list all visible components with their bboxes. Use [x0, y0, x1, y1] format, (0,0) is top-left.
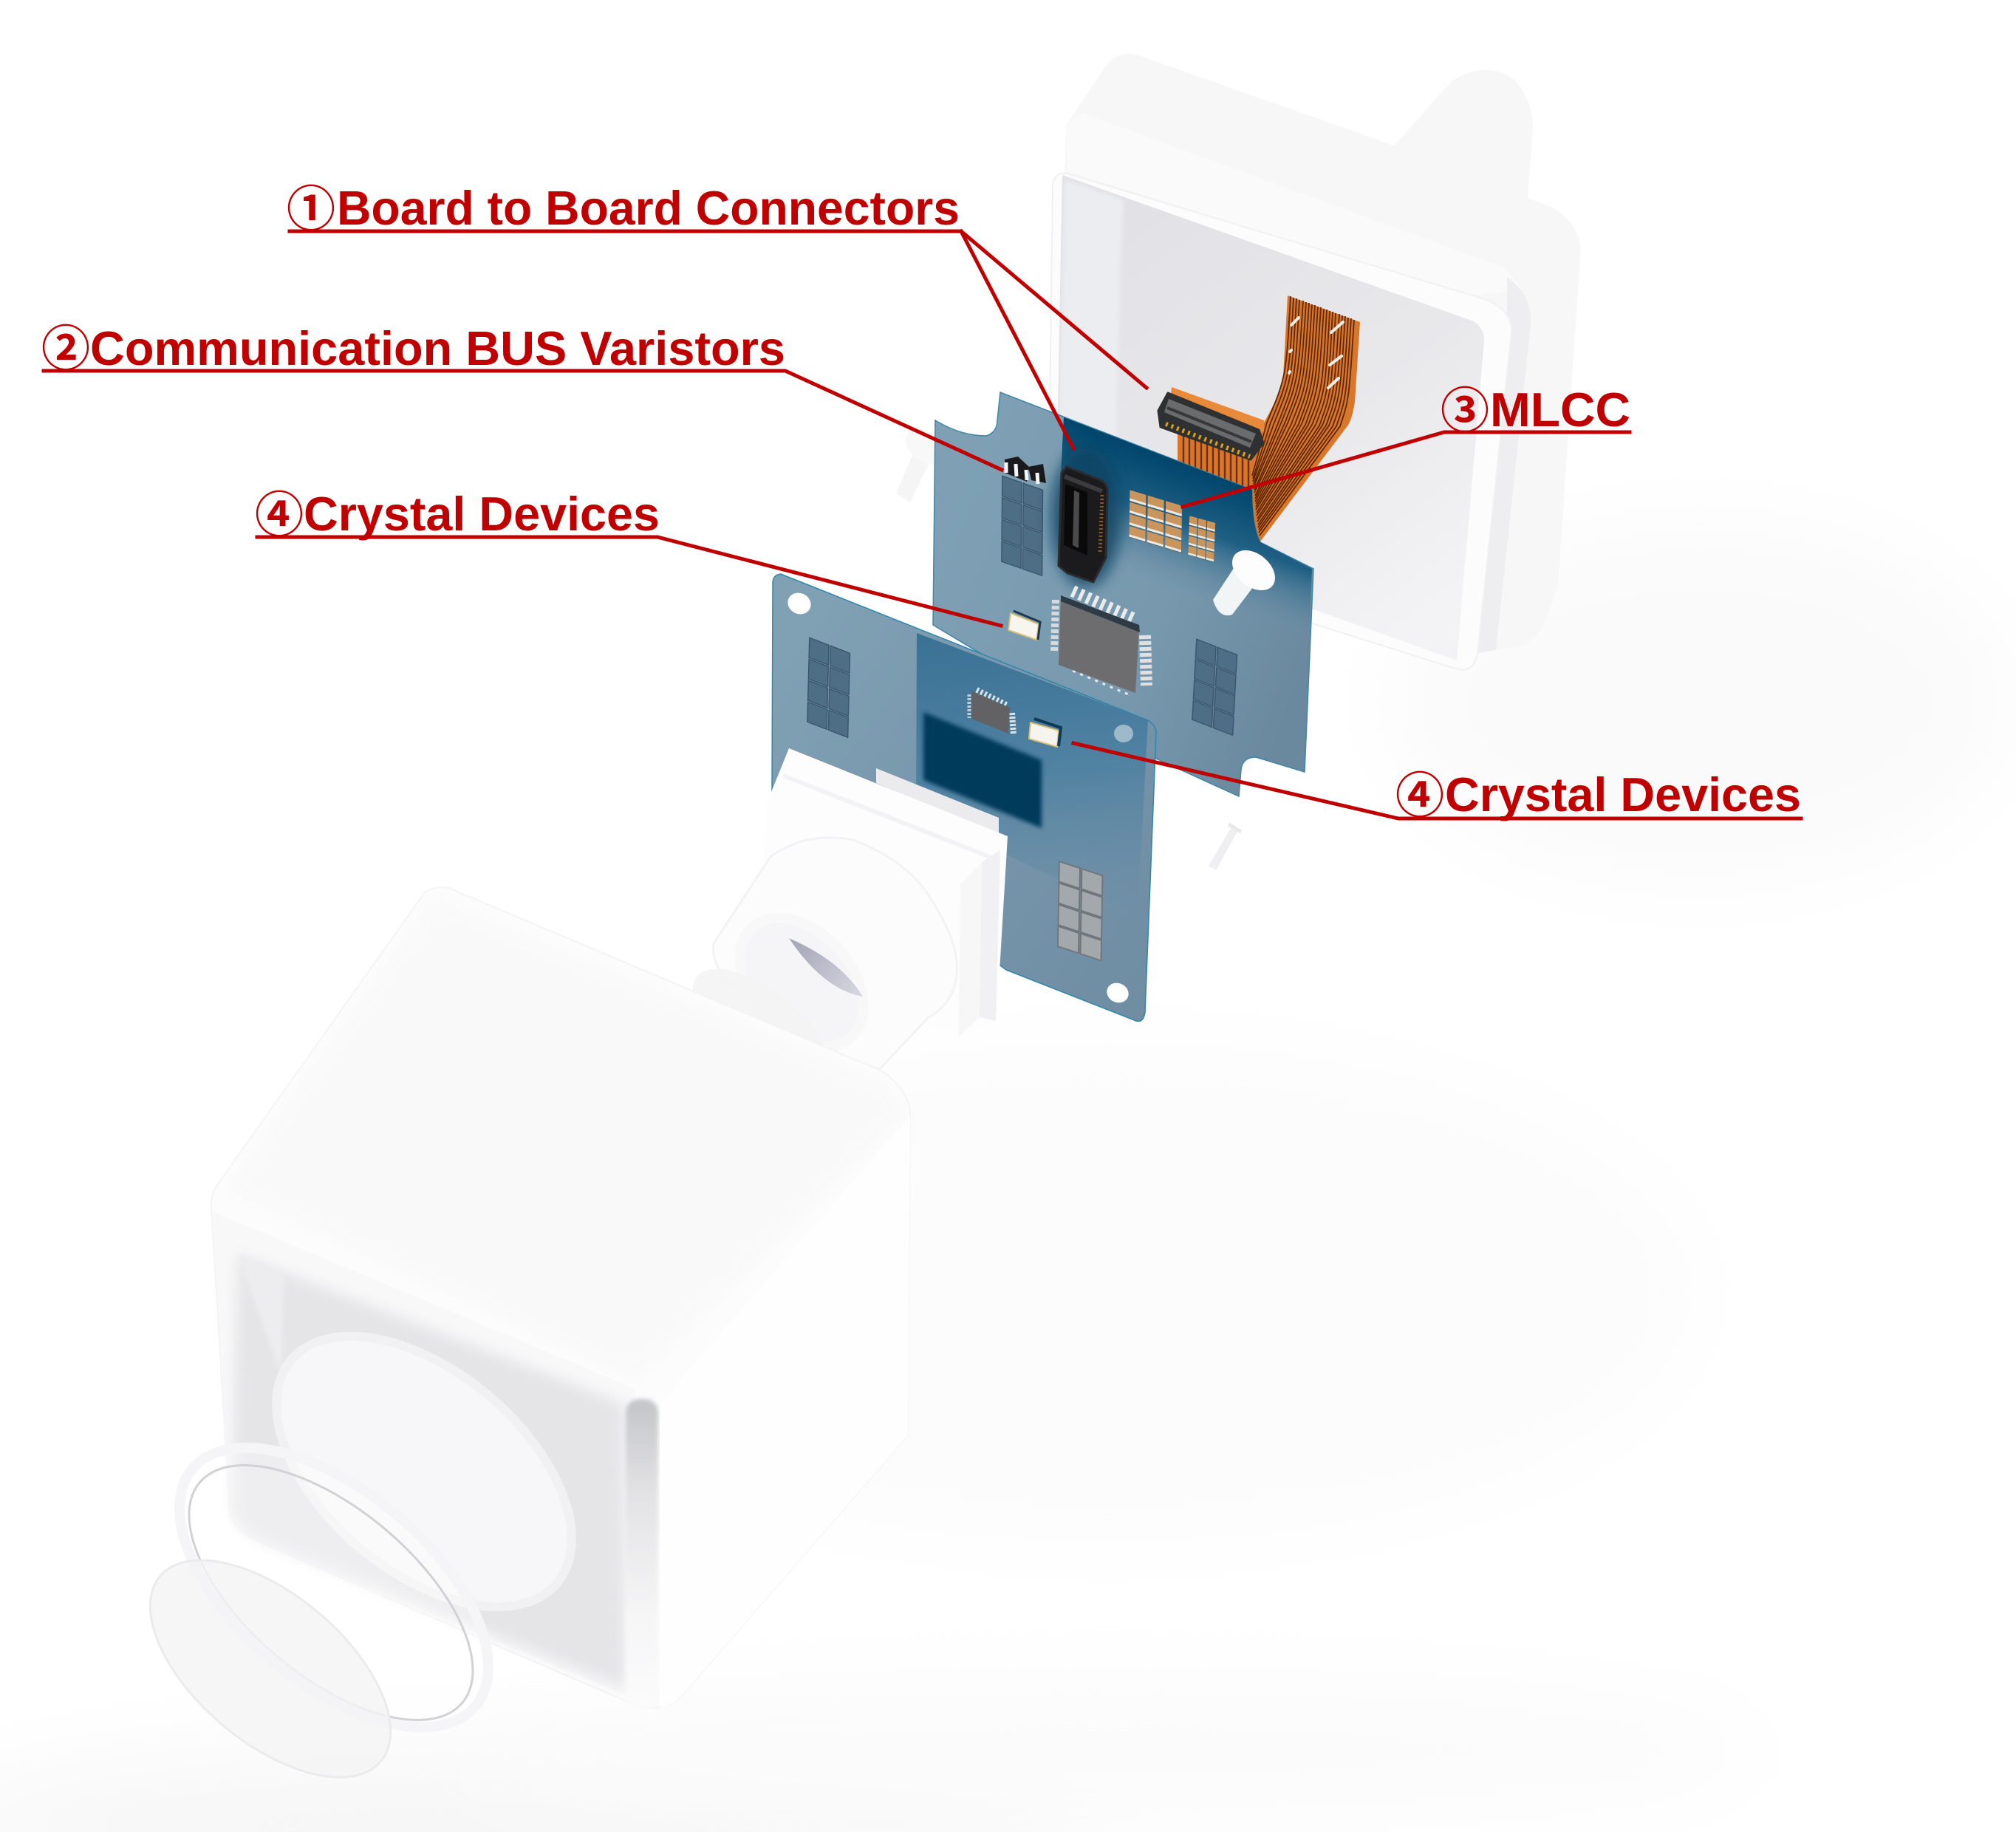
cavity	[1056, 175, 1484, 660]
lens glass sliver	[789, 938, 863, 997]
sensor top plate	[876, 768, 999, 835]
ground shadows	[0, 524, 2009, 1832]
rear circuit board	[933, 392, 1313, 796]
small IC	[969, 690, 1014, 735]
crystal device rear	[1008, 611, 1040, 640]
dark shield square	[923, 712, 1042, 828]
corner strip	[626, 1399, 658, 1709]
cube top face shade	[225, 898, 905, 1381]
label 1: board to board connectors: ①	[287, 182, 335, 236]
front screw	[1213, 542, 1282, 615]
clear ring	[131, 1395, 537, 1780]
main IC	[1054, 591, 1147, 696]
small ring	[674, 948, 847, 1106]
label 4: crystal devices right: ④	[1395, 768, 1444, 823]
label 1: board to board connectors: Board to Board Connectors	[337, 181, 960, 235]
cube front face	[213, 1211, 635, 1699]
MLCC array small	[1188, 516, 1215, 562]
pads right	[1192, 639, 1237, 735]
upper flex	[1252, 295, 1360, 541]
flexible flat cable	[1158, 295, 1360, 541]
leader lines	[44, 231, 1801, 818]
board connector	[1158, 393, 1263, 459]
lower flex	[1178, 425, 1253, 493]
front lens disc	[112, 1520, 428, 1818]
front circuit board	[772, 574, 1156, 1021]
large lens opening	[227, 1284, 621, 1659]
lens barrel	[714, 838, 957, 1069]
barrel inner opening	[715, 894, 888, 1071]
recess shade	[232, 1254, 626, 1689]
cube right face	[660, 1115, 910, 1708]
label 3: MLCC: ③	[1441, 383, 1489, 438]
recess bevel	[238, 1254, 284, 1374]
board to board connector	[1059, 467, 1107, 582]
pads front left	[807, 638, 850, 737]
MLCC array large	[1129, 490, 1182, 553]
pads front bottom	[1058, 861, 1102, 960]
crystal device front	[1029, 719, 1061, 747]
connector header strip	[1170, 387, 1264, 432]
rear housing	[1049, 54, 1581, 669]
flex contact marks	[1289, 318, 1343, 388]
label 2: communication BUS varistors: Communication BUS Varistors	[90, 321, 785, 375]
rear cylinder	[1389, 69, 1533, 199]
label 2: communication BUS varistors: ②	[41, 321, 90, 376]
sensor block	[761, 748, 1008, 1036]
dark translucent zone	[916, 633, 1148, 916]
mounting holes	[785, 589, 1133, 1006]
pads left	[1002, 476, 1043, 575]
label 4: crystal devices right: Crystal Devices	[1445, 768, 1801, 821]
label 4: crystal devices left: Crystal Devices	[304, 487, 660, 541]
front cube housing	[211, 887, 910, 1709]
rear screw left	[896, 422, 952, 502]
shell step band	[1066, 113, 1522, 295]
frame side flange	[1474, 277, 1531, 654]
lens module	[674, 748, 1008, 1106]
board dark top band	[1056, 417, 1312, 635]
label 4: crystal devices left: ④	[255, 488, 304, 542]
varistors	[1005, 457, 1046, 484]
block side bevel	[980, 850, 1000, 1021]
label 3: MLCC: MLCC	[1490, 383, 1630, 437]
cavity left wall	[1059, 180, 1123, 484]
front frame	[1049, 174, 1511, 669]
flex traces	[1252, 296, 1354, 536]
lower right screw	[1209, 824, 1241, 870]
rear shell	[1056, 54, 1581, 650]
connector shadow	[1050, 447, 1121, 587]
